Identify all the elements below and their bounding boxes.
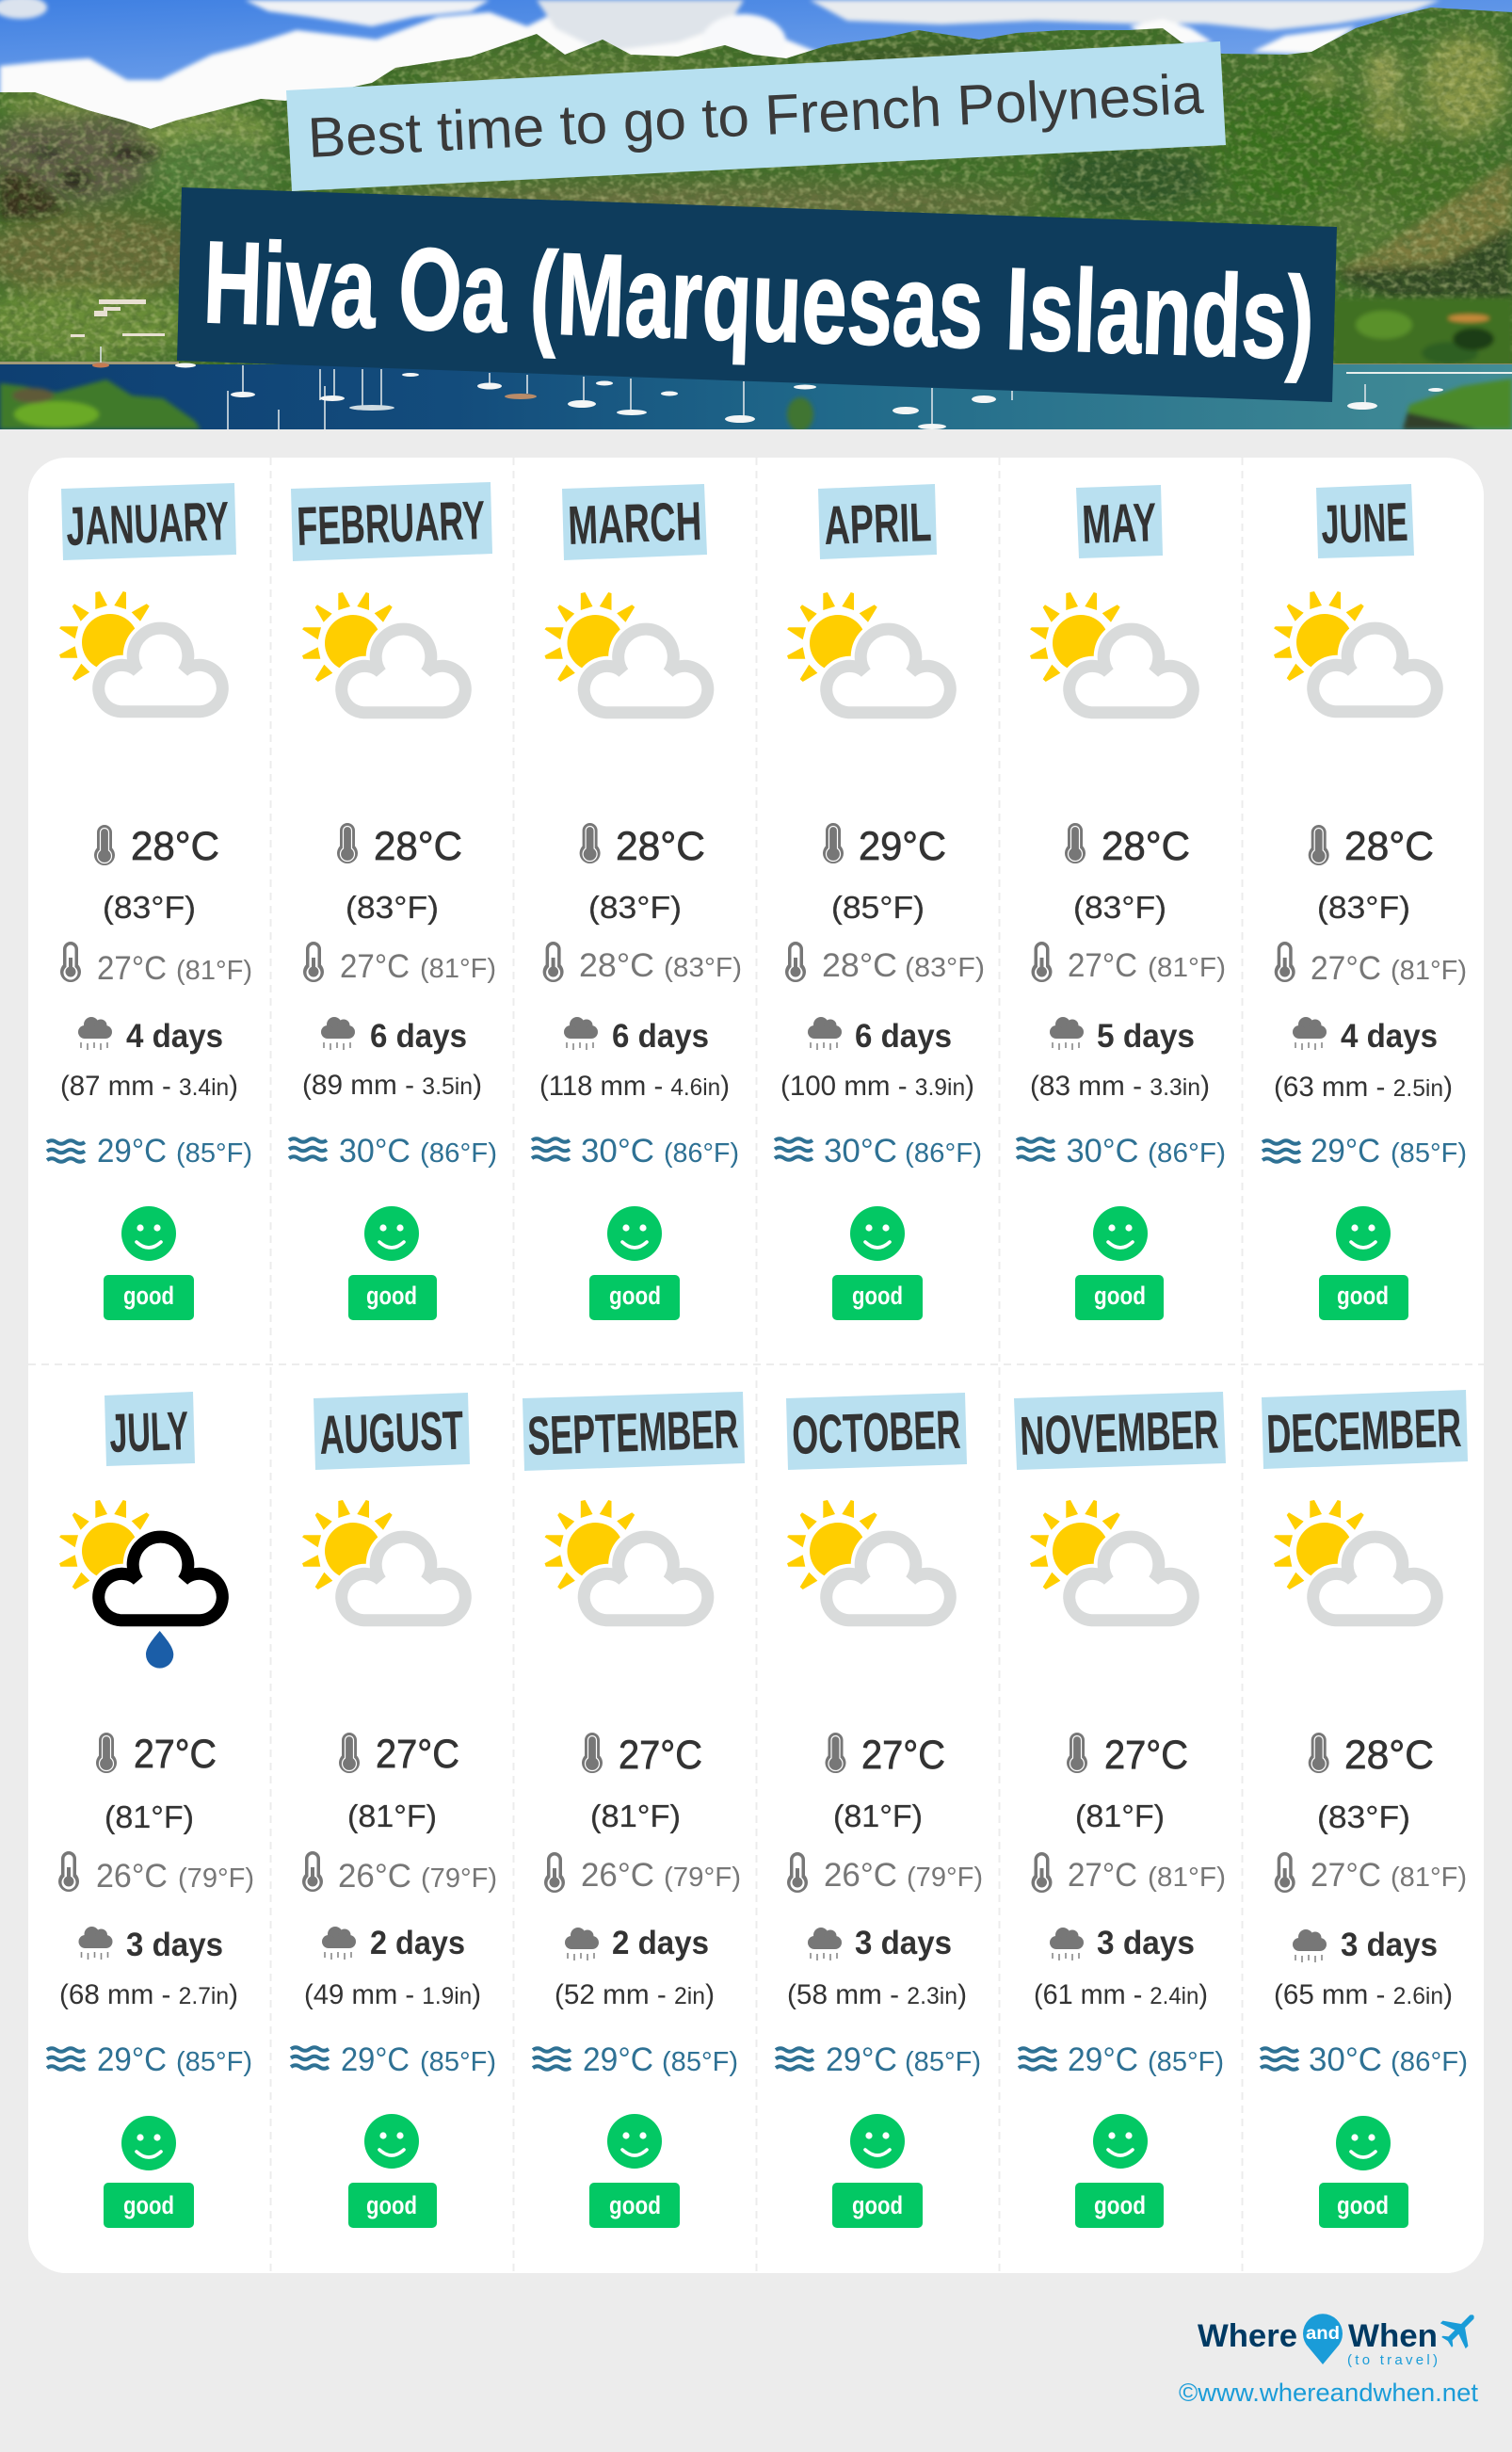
high temperature — [96, 1732, 217, 1834]
month label — [562, 484, 707, 560]
low temperature — [1032, 942, 1226, 984]
sea temperature: (85°F) — [420, 2047, 496, 2077]
low temperature: 28°C — [822, 947, 897, 984]
low temperature: (83°F) — [905, 953, 985, 983]
rainfall: (58 mm - 2.3in) — [787, 1979, 967, 2010]
panel: September — [523, 1392, 745, 2228]
rainfall: 3 days — [1341, 1927, 1438, 1963]
month label: MARCH — [567, 491, 702, 557]
panel: January — [47, 483, 252, 1320]
low temperature: (79°F) — [907, 1863, 983, 1893]
month label: JUNE — [1320, 492, 1408, 556]
rainfall: (118 mm - 4.6in) — [539, 1071, 730, 1102]
low temperature: (81°F) — [1391, 1863, 1467, 1893]
rainfall: 2 days — [612, 1925, 709, 1961]
sea temperature: (85°F) — [905, 2047, 981, 2077]
rainfall: 4 days — [1341, 1018, 1438, 1055]
high temperature: 27°C — [1104, 1733, 1188, 1778]
low temperature: 27°C — [97, 950, 167, 987]
icon: sun behind cloud — [302, 592, 465, 713]
month label — [818, 484, 937, 559]
rating: good — [348, 1206, 437, 1320]
high temperature: 28°C — [1344, 824, 1434, 869]
rating: good: good — [609, 1282, 661, 1310]
high temperature: (83°F) — [1073, 890, 1166, 925]
rainfall — [780, 1017, 974, 1102]
rainfall: (68 mm - 2.7in) — [59, 1979, 238, 2010]
low temperature: (81°F) — [1391, 956, 1467, 986]
hero photo: bay and mountains of Hiva Oa — [0, 0, 1512, 431]
low temperature — [303, 942, 496, 985]
icon: sun behind cloud — [1274, 1500, 1437, 1621]
rainfall: (61 mm - 2.4in) — [1034, 1979, 1208, 2010]
rainfall — [304, 1925, 481, 2010]
sea temperature — [1263, 1133, 1467, 1170]
rainfall — [787, 1925, 967, 2010]
month label: JULY — [108, 1400, 189, 1464]
rating: good — [104, 1206, 194, 1320]
icon: sun behind cloud — [787, 592, 950, 713]
logo: Where and When (to travel) — [1198, 2302, 1487, 2368]
month label — [1076, 485, 1163, 558]
high temperature — [1067, 1733, 1188, 1833]
rating: good — [348, 2114, 437, 2228]
sea temperature — [289, 1133, 497, 1170]
sea temperature: 29°C — [583, 2041, 653, 2078]
icon: location pin — [1303, 2314, 1343, 2364]
high temperature: (81°F) — [590, 1799, 681, 1833]
icon: sun behind cloud — [302, 1500, 465, 1621]
month label: NOVEMBER — [1019, 1399, 1219, 1467]
rainfall: (49 mm - 1.9in) — [304, 1979, 481, 2010]
icon: sun behind cloud — [1274, 591, 1437, 712]
rainfall: 5 days — [1097, 1018, 1195, 1055]
low temperature — [1275, 1852, 1467, 1894]
panel: August — [291, 1393, 497, 2228]
rainfall: (83 mm - 3.3in) — [1030, 1071, 1210, 1102]
month label: AUGUST — [318, 1400, 464, 1466]
high temperature: 28°C — [374, 824, 462, 869]
sea temperature — [47, 2041, 252, 2078]
low temperature — [302, 1851, 497, 1895]
high temperature: 28°C — [1102, 824, 1190, 869]
sea temperature: 29°C — [97, 1133, 167, 1170]
sea temperature: (86°F) — [1148, 1138, 1226, 1169]
low temperature — [787, 1852, 983, 1894]
rating: good: good — [852, 1282, 903, 1310]
high temperature: 28°C — [1344, 1733, 1434, 1778]
month label — [523, 1392, 745, 1471]
rating: good: good — [1094, 1282, 1146, 1310]
icon: sun behind cloud — [1030, 1500, 1193, 1621]
low temperature: 27°C — [340, 948, 410, 985]
rainfall: 6 days — [370, 1018, 467, 1055]
month label: SEPTEMBER — [526, 1398, 739, 1467]
white calendar panel — [28, 458, 1484, 2273]
low temperature — [58, 1851, 254, 1895]
low temperature: (79°F) — [664, 1863, 741, 1893]
month label — [105, 1392, 195, 1466]
rating: good: good — [1337, 1282, 1389, 1310]
month label: APRIL — [823, 492, 932, 557]
low temperature — [60, 942, 252, 987]
sea temperature — [775, 1133, 982, 1170]
month label — [1014, 1392, 1226, 1470]
sea temperature: 29°C — [97, 2041, 167, 2078]
panel: April — [775, 484, 985, 1320]
rainfall: 3 days — [1097, 1925, 1195, 1961]
rating: good: good — [852, 2191, 903, 2219]
sea temperature: (85°F) — [176, 1138, 252, 1169]
low temperature: 27°C — [1311, 1857, 1381, 1894]
sea temperature: 29°C — [1068, 2041, 1138, 2078]
month label: OCTOBER — [791, 1399, 961, 1466]
month label — [1316, 484, 1414, 558]
rainfall: 3 days — [126, 1927, 223, 1963]
rating: good: good — [1337, 2191, 1389, 2219]
website credit: ©www.whereandwhen.net — [1179, 2379, 1478, 2407]
sea temperature: (85°F) — [1148, 2047, 1224, 2077]
low temperature: (81°F) — [176, 956, 252, 986]
sea temperature — [532, 1133, 739, 1170]
rating: good — [1075, 2114, 1164, 2228]
logo: Where and When (to travel): When — [1348, 2318, 1438, 2354]
high temperature — [825, 1733, 945, 1833]
rating: good: good — [366, 2191, 417, 2219]
icon: location pin: and — [1306, 2324, 1340, 2344]
high temperature: 28°C — [131, 824, 219, 869]
sea temperature — [776, 2041, 981, 2078]
panel: July — [47, 1392, 254, 2228]
low temperature — [543, 942, 742, 984]
high temperature: (85°F) — [831, 890, 925, 925]
rainfall — [1274, 1017, 1453, 1103]
high temperature — [582, 1733, 702, 1833]
high temperature: 28°C — [616, 824, 705, 869]
sea temperature — [47, 1133, 252, 1170]
low temperature: 27°C — [1068, 947, 1137, 984]
sea temperature: 30°C — [1066, 1133, 1139, 1170]
sea temperature: (85°F) — [1391, 1138, 1467, 1169]
rating: good — [1319, 2116, 1408, 2228]
rainfall: (63 mm - 2.5in) — [1274, 1072, 1453, 1103]
low temperature: 26°C — [338, 1858, 411, 1895]
high temperature — [94, 824, 219, 925]
rainfall: 3 days — [855, 1925, 952, 1961]
high temperature: 29°C — [859, 824, 946, 869]
rainfall — [302, 1017, 482, 1101]
icon: sun behind cloud — [59, 591, 222, 712]
rainfall: (65 mm - 2.6in) — [1274, 1979, 1453, 2010]
sea temperature — [1019, 2041, 1224, 2078]
rating: good — [832, 2114, 923, 2228]
sea temperature: 29°C — [341, 2041, 410, 2078]
rating: good — [1319, 1206, 1408, 1320]
high temperature — [1309, 1733, 1434, 1834]
sea temperature: (85°F) — [662, 2047, 738, 2077]
sea temperature: 29°C — [826, 2041, 897, 2078]
low temperature: 27°C — [1068, 1857, 1137, 1894]
high temperature — [1309, 824, 1434, 925]
sea temperature: (86°F) — [664, 1138, 739, 1169]
high temperature: (81°F) — [833, 1799, 923, 1833]
rainfall: (89 mm - 3.5in) — [302, 1070, 482, 1101]
panel: November — [1014, 1392, 1226, 2228]
sea temperature: 30°C — [1309, 2041, 1382, 2078]
sea temperature: 30°C — [581, 1133, 654, 1170]
rating: good — [104, 2116, 194, 2228]
sea temperature: 30°C — [339, 1133, 410, 1170]
low temperature: (83°F) — [664, 953, 742, 983]
high temperature: (81°F) — [1075, 1799, 1165, 1833]
rainfall — [59, 1927, 238, 2010]
low temperature — [544, 1852, 741, 1894]
rating: good — [589, 1206, 680, 1320]
sea temperature: (86°F) — [1391, 2047, 1468, 2077]
sea temperature — [1017, 1133, 1226, 1170]
icon: sun, black cloud and rain drop — [59, 1500, 222, 1669]
high temperature: (83°F) — [103, 890, 196, 925]
panel: February — [289, 482, 497, 1320]
icon: sun behind cloud — [544, 592, 708, 713]
rating: good — [589, 2114, 680, 2228]
rating: good: good — [609, 2191, 661, 2219]
rating: good — [832, 1206, 923, 1320]
panel: March — [532, 484, 742, 1320]
rainfall: 2 days — [370, 1925, 465, 1961]
high temperature: 27°C — [619, 1733, 702, 1778]
logo: Where and When (to travel): (to travel) — [1347, 2352, 1438, 2368]
high temperature: (81°F) — [105, 1799, 194, 1834]
rainfall — [539, 1017, 730, 1102]
sea temperature: 29°C — [1311, 1133, 1380, 1170]
high temperature — [823, 823, 946, 925]
icon: sun behind cloud — [544, 1500, 708, 1621]
rainfall — [1030, 1017, 1210, 1102]
high temperature: (83°F) — [1317, 1799, 1410, 1834]
low temperature: (81°F) — [1148, 1863, 1226, 1893]
low temperature: (79°F) — [421, 1863, 497, 1894]
high temperature — [1065, 823, 1190, 925]
icon: plane — [1434, 2302, 1487, 2355]
rainfall: 6 days — [612, 1018, 709, 1055]
sea temperature: 30°C — [824, 1133, 897, 1170]
low temperature: 26°C — [96, 1858, 168, 1895]
low temperature — [785, 942, 985, 984]
sea temperature: (86°F) — [905, 1138, 982, 1169]
panel: May — [1017, 485, 1226, 1320]
rainfall — [1034, 1925, 1208, 2010]
low temperature: (81°F) — [420, 954, 496, 984]
low temperature — [1032, 1852, 1226, 1894]
sea temperature: (85°F) — [176, 2047, 252, 2077]
month label — [61, 483, 236, 560]
icon: sun behind cloud — [787, 1500, 950, 1621]
rating: good — [1075, 1206, 1164, 1320]
month label — [291, 482, 492, 561]
rainfall: 4 days — [126, 1018, 223, 1055]
month label: MAY — [1081, 492, 1157, 556]
rainfall: (52 mm - 2in) — [555, 1979, 715, 2010]
month label: JANUARY — [65, 491, 230, 557]
rainfall: 6 days — [855, 1018, 952, 1055]
panel: June — [1263, 484, 1467, 1320]
rainfall — [555, 1925, 715, 2010]
rating: good: good — [1094, 2191, 1146, 2219]
high temperature: (83°F) — [1317, 890, 1410, 925]
rating: good: good — [366, 1282, 417, 1310]
high temperature: 27°C — [376, 1732, 459, 1777]
high temperature: 27°C — [134, 1732, 217, 1777]
rainfall: (100 mm - 3.9in) — [780, 1071, 974, 1102]
high temperature — [339, 1732, 459, 1833]
month label — [314, 1393, 470, 1470]
high temperature: 27°C — [861, 1733, 945, 1778]
sea temperature — [533, 2041, 738, 2078]
panel: December — [1261, 1390, 1468, 2228]
low temperature: 26°C — [581, 1857, 654, 1894]
month label: FEBRUARY — [296, 490, 486, 557]
rainfall: (87 mm - 3.4in) — [60, 1071, 238, 1102]
banner: subtitle: Best time to go to French Polynesia — [306, 62, 1205, 169]
low temperature: 27°C — [1311, 950, 1381, 987]
sea temperature: (86°F) — [420, 1138, 497, 1169]
icon: sun behind cloud — [1030, 592, 1193, 713]
low temperature: 28°C — [579, 947, 654, 984]
high temperature: (81°F) — [347, 1799, 437, 1833]
low temperature: 26°C — [824, 1857, 897, 1894]
sea temperature — [1261, 2041, 1468, 2078]
rating: good: good — [123, 1282, 174, 1310]
rainfall — [1274, 1927, 1453, 2010]
logo: Where and When (to travel): Where — [1198, 2318, 1297, 2354]
high temperature: (83°F) — [346, 890, 439, 925]
high temperature — [580, 823, 705, 925]
sea temperature — [291, 2041, 496, 2078]
high temperature: (83°F) — [588, 890, 682, 925]
high temperature — [337, 823, 462, 925]
low temperature: (79°F) — [178, 1863, 254, 1894]
low temperature — [1275, 942, 1467, 987]
rainfall — [60, 1017, 238, 1102]
low temperature: (81°F) — [1148, 953, 1226, 983]
banner: subtitle — [286, 41, 1226, 191]
month label — [786, 1393, 967, 1470]
panel: October — [776, 1393, 983, 2228]
rating: good: good — [123, 2191, 174, 2219]
